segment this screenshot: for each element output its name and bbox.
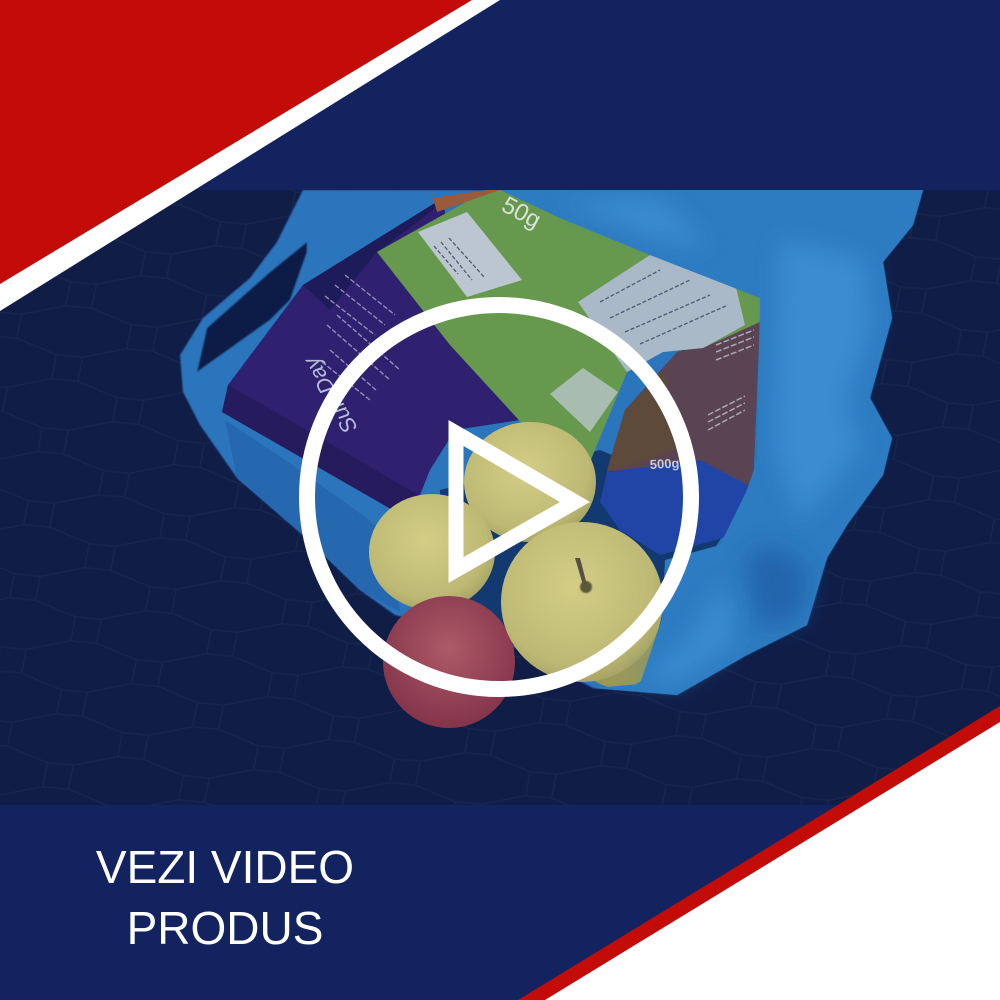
white bottom corner [545, 722, 1000, 1000]
play button [307, 305, 691, 689]
white diagonal stripe [0, 0, 500, 311]
box: cereal with brown and blue sections [600, 322, 760, 555]
purple pack logo text: Sun Day [297, 351, 362, 438]
bottom navy band [0, 805, 838, 1000]
inside of bag [440, 450, 740, 690]
handle hole [197, 242, 307, 372]
red corner triangle [0, 0, 472, 284]
blue plastic bag [180, 190, 923, 695]
apples [369, 422, 663, 728]
green pack weight: 50g [497, 191, 545, 234]
top navy band [195, 0, 1000, 190]
red bottom stripe [518, 706, 1000, 1000]
lower left bag shade [225, 420, 400, 612]
title [96, 841, 354, 954]
purple package [222, 198, 530, 520]
box weight: 500g [649, 455, 680, 472]
title: PRODUS [127, 902, 323, 954]
green pack date label [418, 212, 522, 297]
bag front fold [500, 190, 923, 695]
green package [377, 190, 760, 482]
photo: grocery bag on paving [0, 190, 1000, 805]
title: VEZI VIDEO [96, 841, 354, 893]
